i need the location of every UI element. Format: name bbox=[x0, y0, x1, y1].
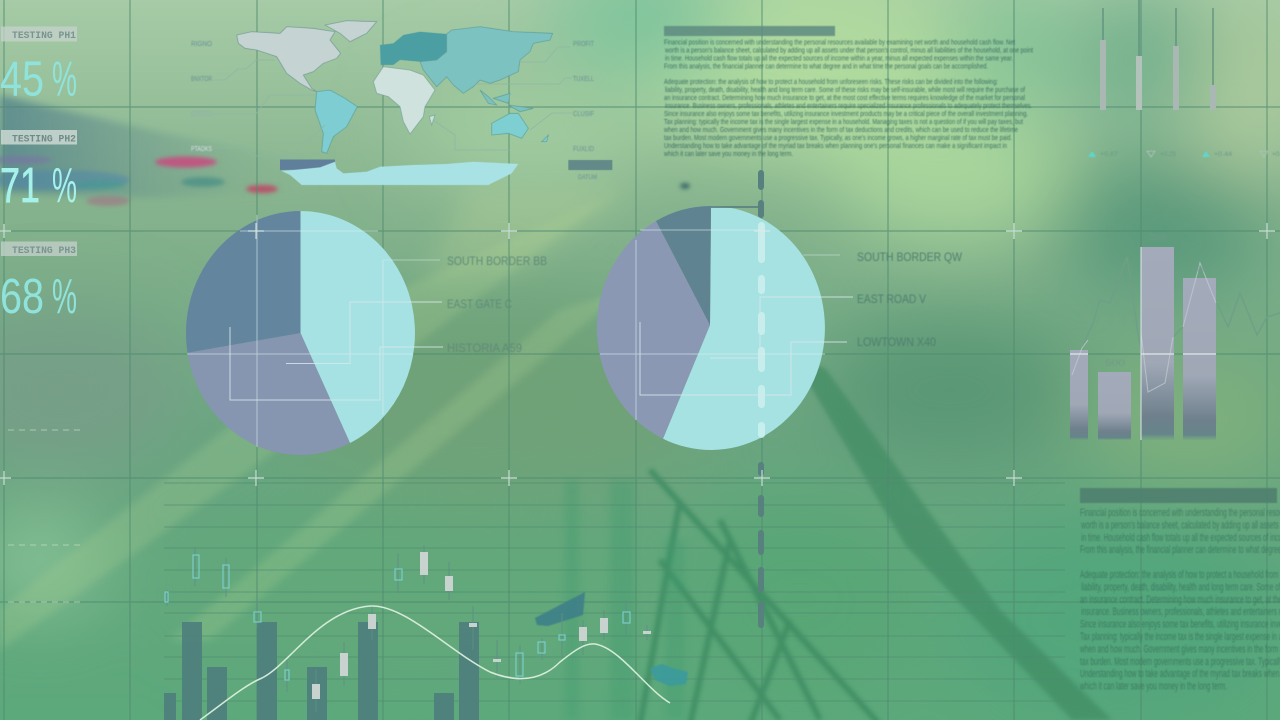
zigzag line behind bars bbox=[1072, 257, 1280, 392]
pie chart: south border bbox=[186, 211, 547, 455]
indicators row bbox=[1088, 151, 1280, 158]
crosshair markers bbox=[0, 223, 1275, 486]
filled candles bbox=[312, 552, 651, 699]
bar value labels bbox=[1105, 232, 1207, 368]
stat: testing phase 3: TESTING PH3 bbox=[12, 245, 76, 257]
map labels: PROFIT bbox=[573, 41, 595, 48]
stat: testing phase 1 bbox=[0, 26, 77, 106]
light pill scale bbox=[758, 222, 765, 438]
heading bar bbox=[664, 26, 835, 36]
stat: testing phase 1: 45 bbox=[0, 52, 44, 106]
text panel: financial planning bbox=[663, 26, 1033, 158]
blurred colour blobs bbox=[0, 156, 690, 206]
blurred dark blobs bbox=[535, 592, 688, 686]
chart: right bar chart with line bbox=[1070, 232, 1280, 440]
left dashed markers bbox=[8, 430, 80, 602]
stat: testing phase 1: % bbox=[52, 52, 77, 106]
pie labels: SOUTH BORDER BB bbox=[447, 254, 547, 268]
body copy: worth is a person's balance sheet, calculated by adding up all assets under that person's control, minus all liabilities of the household, at one point bbox=[664, 48, 1033, 54]
map labels: CLUSIF bbox=[573, 111, 594, 118]
pie labels bbox=[447, 254, 547, 355]
body copy: an insurance contract. Determining how much insurance to get, at the most cost effective terms requires knowledge of the market for personal bbox=[664, 95, 1025, 102]
map labels: PTADKS bbox=[191, 146, 212, 153]
body copy: Since insurance also enjoys some tax benefits, utilizing insurance investment products may be a critical piece of the overall investment planning. bbox=[664, 111, 1028, 118]
candle wicks bbox=[167, 545, 647, 712]
stat: testing phase 3: 68 bbox=[0, 270, 44, 324]
text panel: right financial copy bbox=[1079, 488, 1280, 693]
indicators row: +0.25 bbox=[1160, 151, 1176, 158]
callout lines bbox=[230, 260, 443, 400]
indicators row: +0.44 bbox=[1214, 151, 1232, 158]
stat: testing phase 2: % bbox=[52, 159, 77, 213]
chart rule lines bbox=[164, 483, 1065, 701]
outlined candles bbox=[165, 555, 630, 680]
map labels: TUXELL bbox=[573, 76, 594, 83]
map labels: DATUM bbox=[578, 175, 597, 181]
body copy: in time. Household cash flow totals up all the expected sources of income within a year, minus all expected expenses within the same year. bbox=[665, 56, 1013, 62]
body copy bbox=[1079, 507, 1280, 693]
body copy: which it can later save you money in the long term. bbox=[1079, 680, 1227, 693]
body copy: when and how much. Government gives many incentives in the form of tax deductions and credits, which can be used to reduce the lifetime bbox=[663, 127, 1018, 134]
map labels: BNXTOR bbox=[191, 76, 212, 83]
bars bbox=[1070, 350, 1088, 440]
vertical pill scale bbox=[758, 170, 764, 628]
pie slices bbox=[300, 211, 415, 443]
body copy: Understanding how to take advantage of the myriad tax breaks when planning one's personal finances can make a significant impact in bbox=[664, 143, 1007, 150]
pie labels: EAST GATE C bbox=[447, 297, 512, 311]
heading bar bbox=[1080, 488, 1277, 503]
body copy bbox=[663, 40, 1033, 158]
pie labels: HISTORIA A59 bbox=[447, 341, 522, 355]
map labels bbox=[191, 41, 597, 181]
bar value labels: 700 bbox=[1192, 264, 1207, 274]
body copy: insurance. Business owners, professionals, athletes and entertainers require specialized insurance professionals to adequately protect themselves. bbox=[665, 103, 1032, 110]
panel: testing phase stats bbox=[0, 26, 77, 324]
chart: bottom candlesticks bbox=[165, 545, 651, 712]
pie labels: EAST ROAD V bbox=[857, 292, 926, 306]
map labels: FUXLID bbox=[573, 146, 594, 153]
chart: bottom bars bbox=[164, 622, 479, 720]
body copy: Tax planning: typically the income tax is the single largest expense in a household. Managing taxes is not a question of if you will pay taxes, but bbox=[664, 119, 1023, 126]
body copy: which it can later save you money in the long term. bbox=[663, 151, 793, 158]
pie slices bbox=[663, 206, 825, 450]
line over bars bbox=[1072, 263, 1216, 392]
body copy: liability, property, death, disability, health and long term care. Some of these risks may be self-insurable, while most will require the purchase of bbox=[665, 87, 1025, 94]
callout lines bbox=[640, 207, 853, 395]
stat: testing phase 3 bbox=[0, 242, 77, 324]
pie labels bbox=[857, 250, 963, 349]
bar value labels: 500 bbox=[1105, 358, 1125, 368]
world map bbox=[191, 21, 612, 185]
pie labels: SOUTH BORDER QW bbox=[857, 250, 963, 264]
map labels: CRSTED bbox=[191, 111, 212, 118]
map labels: RIGNO bbox=[191, 41, 213, 48]
body copy: Financial position is concerned with understanding the personal resources available by examining net worth and household cash flow. Net bbox=[664, 40, 1015, 46]
body copy: From this analysis, the financial planner can determine to what degree and in what time the personal goals can be accomplished. bbox=[664, 64, 988, 70]
stat: testing phase 2: 71 bbox=[0, 159, 40, 213]
stat: testing phase 1: TESTING PH1 bbox=[12, 30, 76, 42]
indicators row: +0.67 bbox=[1100, 151, 1118, 158]
pie chart: east road bbox=[597, 206, 963, 450]
trend curve bbox=[200, 606, 670, 720]
pie labels: LOWTOWN X40 bbox=[857, 335, 936, 349]
stat: testing phase 3: % bbox=[52, 270, 77, 324]
stat: testing phase 2 bbox=[0, 130, 77, 213]
stat: testing phase 2: TESTING PH2 bbox=[12, 134, 76, 146]
map label connectors bbox=[213, 47, 572, 156]
bar value labels: 1000 bbox=[1149, 232, 1167, 242]
body copy: Adequate protection: the analysis of how to protect a household from unforeseen risks. These risks can be divided into the following: bbox=[664, 79, 998, 86]
body copy: tax burden. Most modern governments use a progressive tax. Typically, as one's income grows, a higher marginal rate of tax must be paid. bbox=[664, 135, 1012, 142]
chart: top right candlesticks bbox=[1088, 0, 1280, 158]
